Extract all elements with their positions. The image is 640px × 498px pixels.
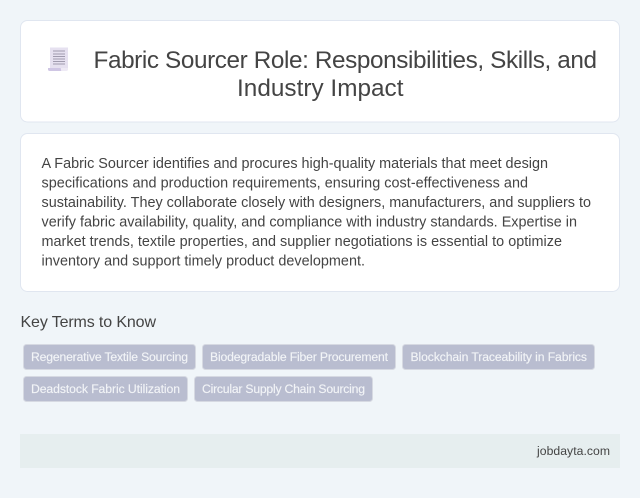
tag group: key terms bbox=[24, 344, 594, 402]
tag: deadstock fabric utilization: Deadstock Fabric Utilization bbox=[31, 382, 180, 396]
icon: paper scroll bbox=[48, 48, 68, 71]
tag: biodegradable fiber procurement bbox=[202, 344, 396, 370]
tag: circular supply chain sourcing: Circular Supply Chain Sourcing bbox=[202, 382, 365, 396]
title: Industry Impact bbox=[237, 75, 404, 102]
tag: blockchain traceability bbox=[402, 344, 594, 370]
text block: description: specifications and production requirements, ensuring cost-effectiveness and bbox=[42, 176, 528, 192]
tag: biodegradable fiber procurement: Biodegradable Fiber Procurement bbox=[210, 350, 389, 364]
title: Fabric Sourcer Role: Responsibilities, Skills, and bbox=[94, 47, 597, 74]
heading: key terms: Key Terms to Know bbox=[20, 314, 156, 331]
title bbox=[94, 47, 597, 102]
text block: description: verify fabric availability, quality, and compliance with industry standards. Expertise in bbox=[42, 214, 577, 230]
text block: description: inventory and support timely product development. bbox=[42, 254, 365, 270]
panel: description card bbox=[20, 134, 620, 292]
panel: header card bbox=[20, 20, 620, 122]
tag: regenerative textile sourcing bbox=[24, 344, 196, 370]
text block: description: A Fabric Sourcer identifies and procures high-quality materials that meet design bbox=[42, 156, 548, 172]
tag: blockchain traceability: Blockchain Traceability in Fabrics bbox=[410, 350, 587, 364]
tag: circular supply chain sourcing bbox=[194, 376, 372, 402]
text block: description: sustainability. They collaborate closely with designers, manufacturers, and suppliers to bbox=[42, 195, 591, 211]
tag: regenerative textile sourcing: Regenerative Textile Sourcing bbox=[31, 350, 188, 364]
tag: deadstock fabric utilization bbox=[24, 376, 188, 402]
footer bar bbox=[20, 434, 620, 468]
text block: description: market trends, textile properties, and supplier negotiations is essential to optimize bbox=[42, 234, 562, 250]
footer text: jobdayta.com bbox=[536, 444, 610, 458]
text block: description bbox=[42, 156, 591, 270]
